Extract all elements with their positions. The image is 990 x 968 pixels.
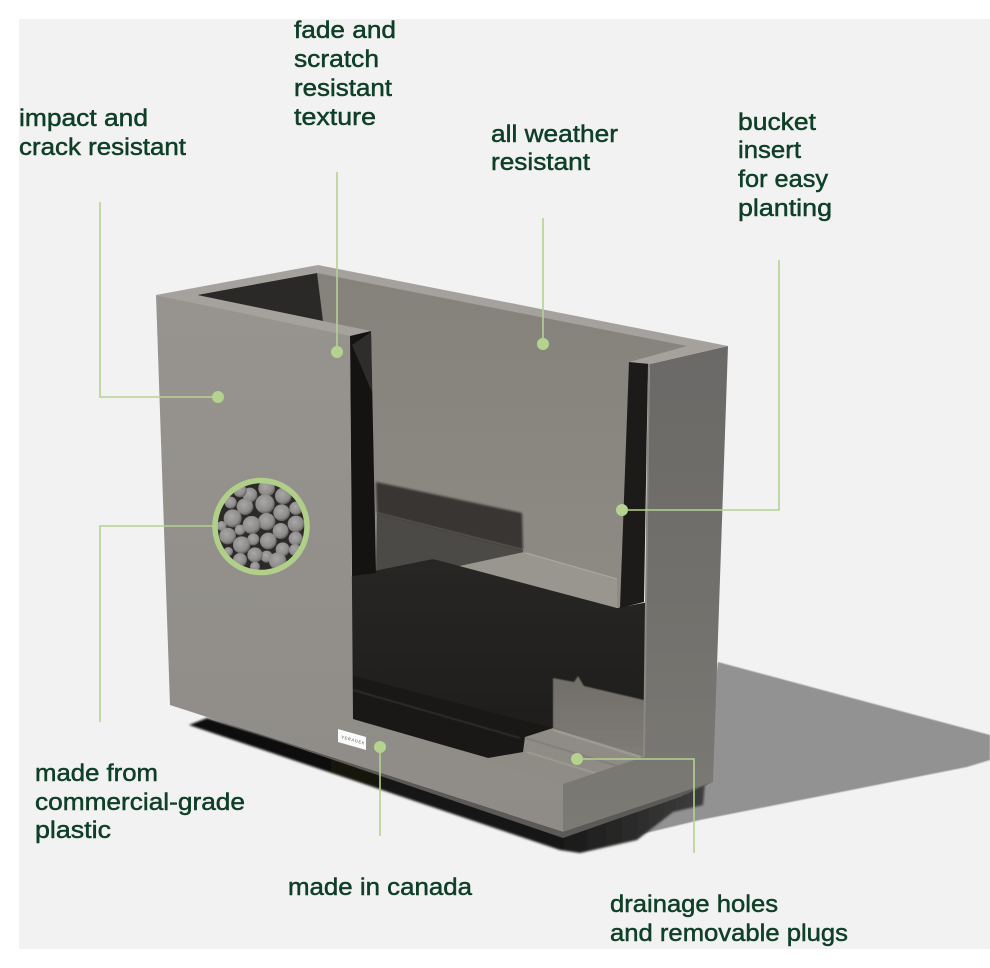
callout: made in canada	[288, 741, 472, 901]
callout: made from commercial-grade plastic: commercial-grade	[35, 789, 245, 816]
lit lower back wall	[553, 676, 648, 760]
callout: drainage holes and removable plugs	[571, 753, 848, 947]
callout: bucket insert for easy planting	[616, 109, 832, 516]
callout: made from commercial-grade plastic	[35, 526, 245, 844]
callout: bucket insert for easy planting: insert	[738, 137, 801, 164]
lower interior band	[350, 675, 552, 758]
bucket floor shadow	[376, 482, 617, 608]
callout: fade and scratch resistant texture	[294, 17, 396, 358]
callout: bucket insert for easy planting: planting	[738, 195, 832, 222]
callout: impact and crack resistant	[19, 105, 224, 403]
left vertical dark strip	[350, 331, 376, 576]
base drain tray	[353, 719, 645, 785]
texture magnifier	[215, 480, 307, 572]
right side face	[563, 346, 728, 832]
callout: bucket insert for easy planting: for easy	[738, 166, 829, 193]
logo plate	[338, 729, 366, 750]
callout: fade and scratch resistant texture: resistant	[294, 75, 392, 102]
callout: fade and scratch resistant texture: scratch	[294, 46, 379, 73]
right vertical dark strip	[620, 362, 648, 608]
back wall	[197, 272, 690, 608]
callout: fade and scratch resistant texture: fade and	[294, 17, 396, 44]
cast shadow on floor	[189, 662, 990, 853]
callout: all weather resistant: all weather	[491, 121, 618, 148]
lower dark interior	[350, 559, 648, 760]
logo plate: VERADEK	[341, 734, 366, 746]
callout: drainage holes and removable plugs: drainage holes	[610, 891, 778, 918]
callout: made in canada: made in canada	[288, 874, 472, 901]
callout: bucket insert for easy planting: bucket	[738, 109, 816, 136]
front left face	[156, 295, 563, 832]
callout: made from commercial-grade plastic: made from	[35, 760, 158, 787]
base bottom lip	[207, 717, 713, 838]
callout: fade and scratch resistant texture: texture	[294, 104, 376, 131]
callout: all weather resistant: resistant	[491, 149, 590, 176]
inner left corner dark opening	[197, 273, 323, 321]
callout: impact and crack resistant: impact and	[19, 105, 148, 132]
top rim	[156, 265, 728, 364]
callout: made from commercial-grade plastic: plastic	[35, 817, 111, 844]
callout: impact and crack resistant: crack resistant	[19, 134, 186, 161]
callout: all weather resistant	[491, 121, 618, 350]
planter	[156, 265, 728, 838]
callout: drainage holes and removable plugs: and removable plugs	[610, 920, 848, 947]
